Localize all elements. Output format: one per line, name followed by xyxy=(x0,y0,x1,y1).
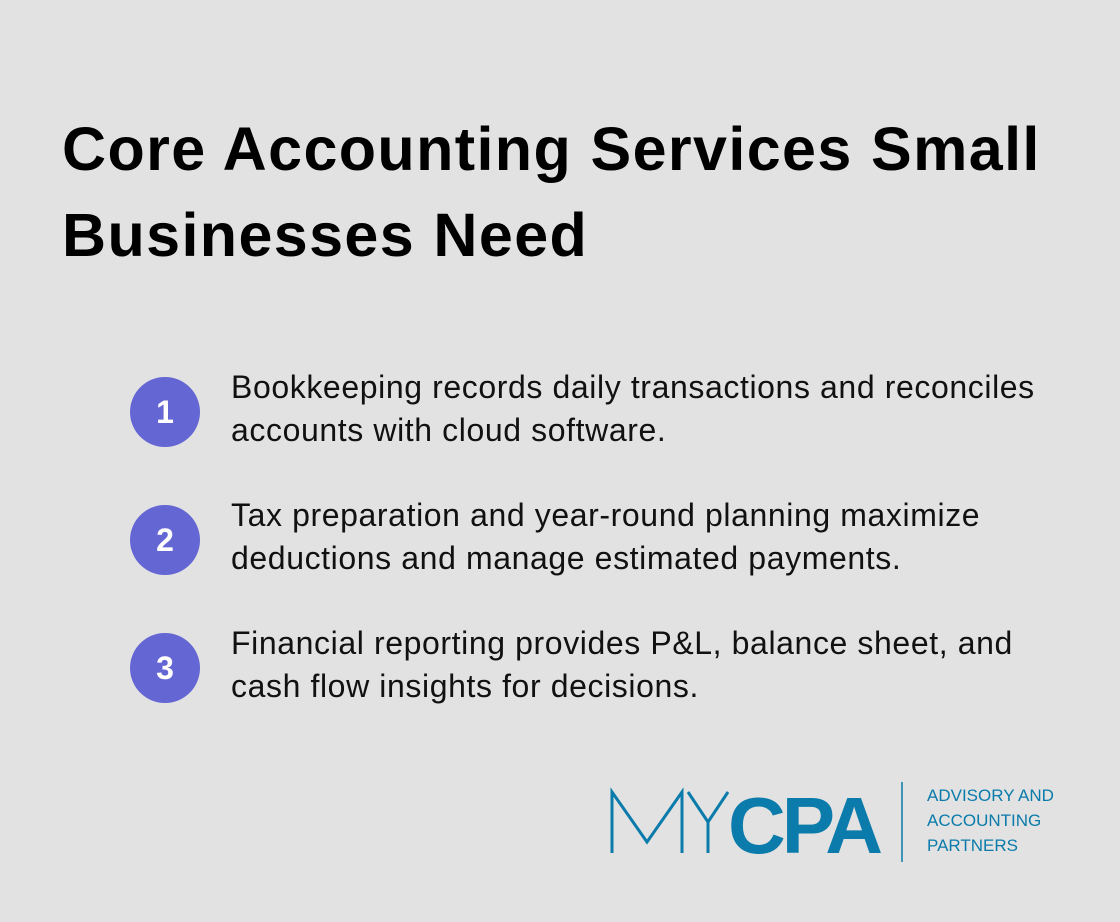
number badge 1 xyxy=(130,377,200,447)
logo xyxy=(610,781,1054,864)
title: Core Accounting Services Small xyxy=(62,115,1041,183)
text 3: cash flow insights for decisions. xyxy=(231,668,699,704)
number badge 2: 2 xyxy=(156,522,174,558)
title: Businesses Need xyxy=(62,201,588,269)
text 1: accounts with cloud software. xyxy=(231,412,666,448)
title xyxy=(62,115,1041,269)
text 2 xyxy=(231,497,980,576)
item 2 xyxy=(130,497,980,576)
text 3 xyxy=(231,625,1013,704)
text 1 xyxy=(231,369,1035,448)
item 3 xyxy=(130,625,1013,704)
logo: PARTNERS xyxy=(927,836,1018,855)
logo: ACCOUNTING xyxy=(927,811,1041,830)
logo: ADVISORY AND xyxy=(927,786,1054,805)
number badge 2 xyxy=(130,505,200,575)
number badge 3: 3 xyxy=(156,650,174,686)
text 2: deductions and manage estimated payments. xyxy=(231,540,901,576)
number badge 1: 1 xyxy=(156,394,174,430)
item 1 xyxy=(130,369,1035,448)
number badge 3 xyxy=(130,633,200,703)
text 2: Tax preparation and year-round planning maximize xyxy=(231,497,980,533)
text 3: Financial reporting provides P&L, balance sheet, and xyxy=(231,625,1013,661)
text 1: Bookkeeping records daily transactions and reconciles xyxy=(231,369,1035,405)
